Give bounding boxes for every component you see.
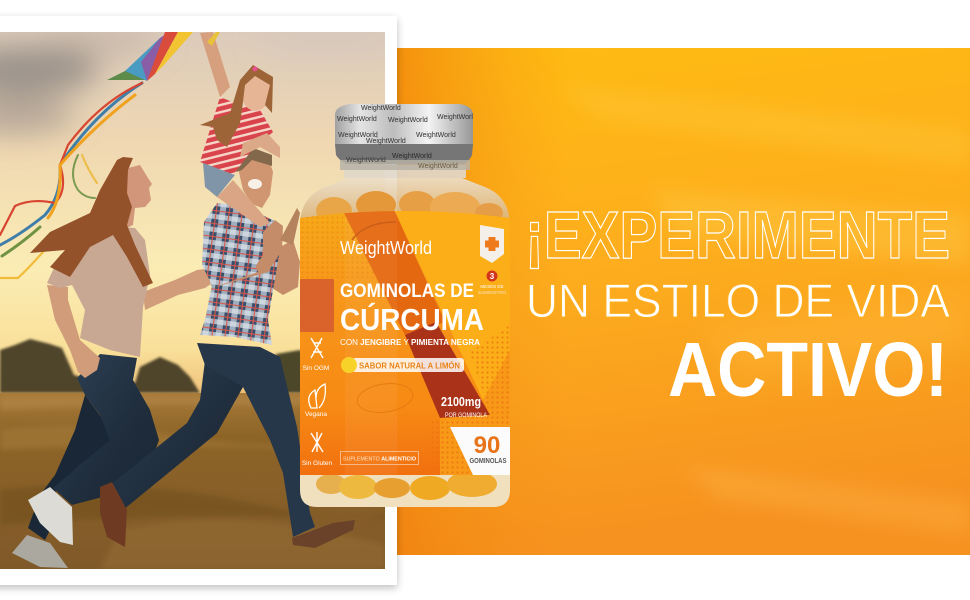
- gummies at bottom: [316, 471, 497, 500]
- kite handle in hand: [207, 32, 220, 46]
- suplemento box: SUPLEMENTO ALIMENTICIO: [343, 456, 417, 462]
- woman shirt: [47, 226, 150, 357]
- woman jeans: [53, 354, 159, 505]
- woman face: [127, 165, 152, 228]
- headline line 2: UN ESTILO DE VIDA: [526, 274, 951, 327]
- icon: vegana: [305, 384, 327, 418]
- kite ribbons: [0, 83, 142, 278]
- trees: [0, 339, 330, 393]
- label dark red diagonal band: [405, 322, 490, 418]
- label months badge: [478, 270, 507, 295]
- woman grey shoe: [12, 535, 68, 568]
- woman: [12, 157, 217, 568]
- photo: family running with kite: [0, 30, 400, 569]
- woman white shoe: [28, 487, 73, 545]
- label gold left dots: [300, 205, 380, 278]
- product title: GOMINOLAS DE: [340, 280, 474, 302]
- field: [0, 393, 385, 569]
- icon: sin gluten: Sin Gluten: [302, 460, 333, 467]
- dose: POR GOMINOLA: [445, 413, 487, 419]
- girl arm on head: [240, 133, 280, 158]
- label months badge: MESES DE: [480, 284, 504, 289]
- cap brand text: WeightWorld: [366, 138, 406, 145]
- product subtitle: CON JENGIBRE Y PIMIENTA NEGRA: [340, 337, 480, 347]
- label yellow right area: [392, 205, 510, 400]
- sky: [0, 32, 385, 397]
- neck ring: [340, 160, 470, 170]
- man hair: [236, 149, 272, 172]
- label months badge: 3: [490, 272, 495, 281]
- man front leg: [197, 343, 315, 537]
- woman back leg: [28, 395, 118, 540]
- man mouth: [248, 179, 262, 189]
- girl face: [243, 76, 270, 111]
- cap brand text: WeightWorld: [361, 105, 401, 112]
- man back leg: [113, 345, 260, 510]
- icon: sin OGM: Sin OGM: [303, 365, 329, 372]
- flavour pill: SABOR NATURAL A LIMÓN: [359, 360, 460, 370]
- cap brand text: WeightWorld: [337, 116, 377, 123]
- girl hair clip: [252, 66, 258, 72]
- suplemento box: [340, 452, 418, 464]
- bottle bottom glass: [300, 470, 510, 507]
- brand name: WeightWorld: [340, 238, 432, 258]
- girl: [200, 32, 300, 245]
- reflection: [345, 205, 397, 475]
- panel: orange background: [397, 48, 970, 555]
- icon: sin OGM: [303, 338, 329, 372]
- cap brand text: [337, 105, 477, 145]
- man: [100, 149, 355, 548]
- bottle neck: [344, 165, 466, 178]
- cap brand text: WeightWorld: [416, 132, 456, 139]
- cap brand text: WeightWorld: [437, 114, 477, 121]
- count: 90 gominolas: 90: [474, 432, 500, 459]
- bottle shoulder glass: [300, 178, 510, 232]
- bottle cap: WeightWorld: [418, 163, 458, 170]
- girl hair: [200, 65, 273, 147]
- girl raised arm: [200, 32, 230, 97]
- man sleeve: [206, 266, 258, 288]
- label dot pattern corner: [430, 325, 510, 475]
- man neck and face: [238, 157, 273, 208]
- gummies at top: [316, 191, 503, 225]
- panel: photo frame: [0, 16, 397, 588]
- label 90 white corner: [450, 427, 510, 475]
- count: 90 gominolas: [470, 432, 507, 465]
- cap brand text: WeightWorld: [388, 117, 428, 124]
- dose: [441, 394, 487, 419]
- girl shorts: [203, 163, 235, 197]
- girl shoe: [280, 208, 300, 245]
- label white badge: [480, 225, 504, 263]
- woman hip arm: [47, 285, 100, 378]
- man arm: [206, 220, 283, 288]
- clouds: [0, 32, 147, 150]
- label months badge: SUMINISTRO: [478, 290, 507, 295]
- woman right arm: [144, 269, 211, 310]
- label orange diagonal band: [340, 205, 445, 335]
- icon: sin gluten: [302, 432, 333, 467]
- count: 90 gominolas: GOMINOLAS: [470, 458, 507, 465]
- bottle label: [300, 200, 510, 475]
- girl shirt: [200, 97, 273, 175]
- label right lower area: [440, 350, 510, 475]
- bottle: [300, 104, 510, 507]
- man shirt: [200, 203, 279, 345]
- bottle cap: WeightWorld: [392, 153, 432, 160]
- bottle cap: [335, 104, 477, 170]
- man back shoe: [100, 482, 127, 547]
- flavour pill: [341, 357, 464, 373]
- man front shoe: [292, 520, 355, 548]
- man far arm: [272, 240, 300, 295]
- headline: [525, 198, 951, 413]
- product title: [340, 280, 484, 337]
- kite: [107, 32, 193, 81]
- gummy outline on label: [355, 380, 415, 416]
- girl leg: [217, 180, 270, 227]
- woman hair: [30, 157, 153, 287]
- icon: vegana: Vegana: [305, 411, 327, 418]
- dose: 2100mg: [441, 394, 481, 409]
- label base: [300, 200, 510, 475]
- slice outline on band: [352, 222, 396, 240]
- cap brand text: WeightWorld: [338, 132, 378, 139]
- bottle cap: WeightWorld: [346, 157, 386, 164]
- label square turmeric patch: [300, 279, 334, 332]
- product title: CÚRCUMA: [340, 301, 484, 337]
